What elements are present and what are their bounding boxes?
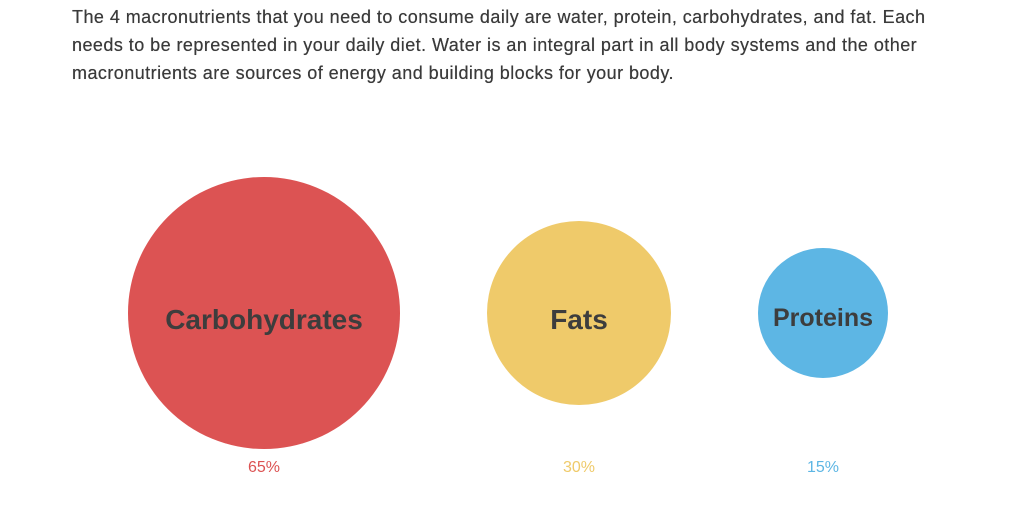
- circle: fats: [487, 221, 671, 405]
- circle: carbohydrates: [128, 177, 400, 449]
- intro text: The 4 macronutrients that you need to consume daily are water, protein, carbohydrates, and fat. Each: [72, 7, 925, 27]
- percentage: 30%: 30%: [563, 459, 595, 476]
- percentage: 15%: 15%: [807, 459, 839, 476]
- circle: proteins: Proteins: [773, 304, 873, 332]
- intro text: needs to be represented in your daily diet. Water is an integral part in all body systems and the other: [72, 35, 917, 55]
- circle: fats: Fats: [550, 304, 608, 335]
- intro text: [72, 7, 925, 84]
- circle: carbohydrates: Carbohydrates: [165, 304, 363, 335]
- percentage: 65%: 65%: [248, 459, 280, 476]
- intro text: macronutrients are sources of energy and building blocks for your body.: [72, 63, 674, 83]
- circle: proteins: [758, 248, 888, 378]
